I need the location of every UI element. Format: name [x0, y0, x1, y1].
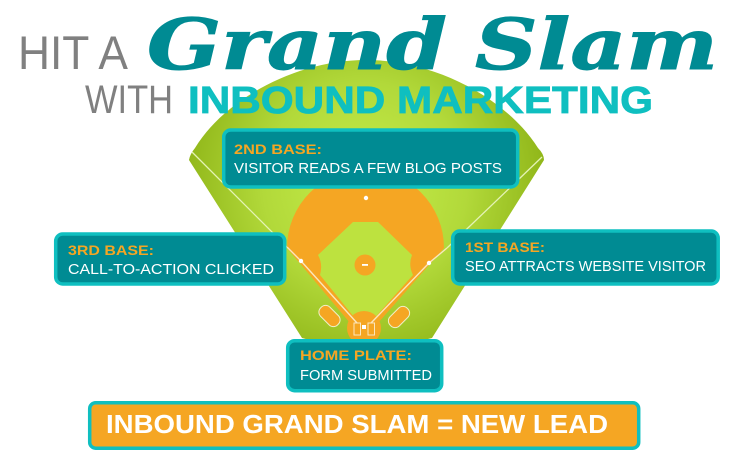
title: hit a: HIT A — [18, 26, 129, 79]
infield dirt — [287, 170, 444, 323]
title — [18, 3, 718, 122]
third base — [299, 259, 303, 263]
left batter's box — [354, 323, 360, 335]
second base — [364, 196, 368, 200]
callout: home plate: HOME PLATE: — [300, 347, 412, 363]
callout: 3rd base: CALL-TO-ACTION CLICKED — [68, 261, 274, 278]
infield grass — [318, 222, 413, 322]
home plate dirt — [347, 311, 381, 345]
outfield grass — [189, 60, 544, 347]
right on-deck circle — [386, 304, 412, 330]
pitching rubber — [362, 264, 368, 266]
foul lines — [192, 152, 542, 248]
callout: 2nd base — [224, 130, 518, 187]
banner: new lead: INBOUND GRAND SLAM = NEW LEAD — [106, 409, 608, 439]
banner: new lead — [90, 403, 639, 448]
callout: 2nd base: 2ND BASE: — [234, 141, 322, 157]
callout: 1st base: SEO ATTRACTS WEBSITE VISITOR — [465, 258, 706, 275]
callout: 1st base — [453, 231, 718, 284]
callout: home plate — [288, 341, 442, 391]
left on-deck circle — [316, 303, 343, 329]
callout: 3rd base — [56, 234, 285, 284]
first base — [427, 261, 431, 265]
baseball field — [189, 60, 544, 347]
callout: home plate: FORM SUBMITTED — [300, 367, 432, 384]
right batter's box — [368, 323, 374, 335]
callout: 3rd base: 3RD BASE: — [68, 242, 154, 258]
pitcher's mound — [354, 254, 376, 276]
title: slam: Slam — [475, 3, 718, 86]
title: with: WITH — [85, 78, 173, 122]
callout: 1st base: 1ST BASE: — [465, 239, 545, 255]
home plate — [362, 325, 366, 329]
chalk base lines — [287, 247, 447, 323]
title: grand: Grand — [147, 3, 447, 86]
title: inbound marketing: INBOUND MARKETING — [188, 80, 653, 122]
callout: 2nd base: VISITOR READS A FEW BLOG POSTS — [234, 160, 502, 177]
